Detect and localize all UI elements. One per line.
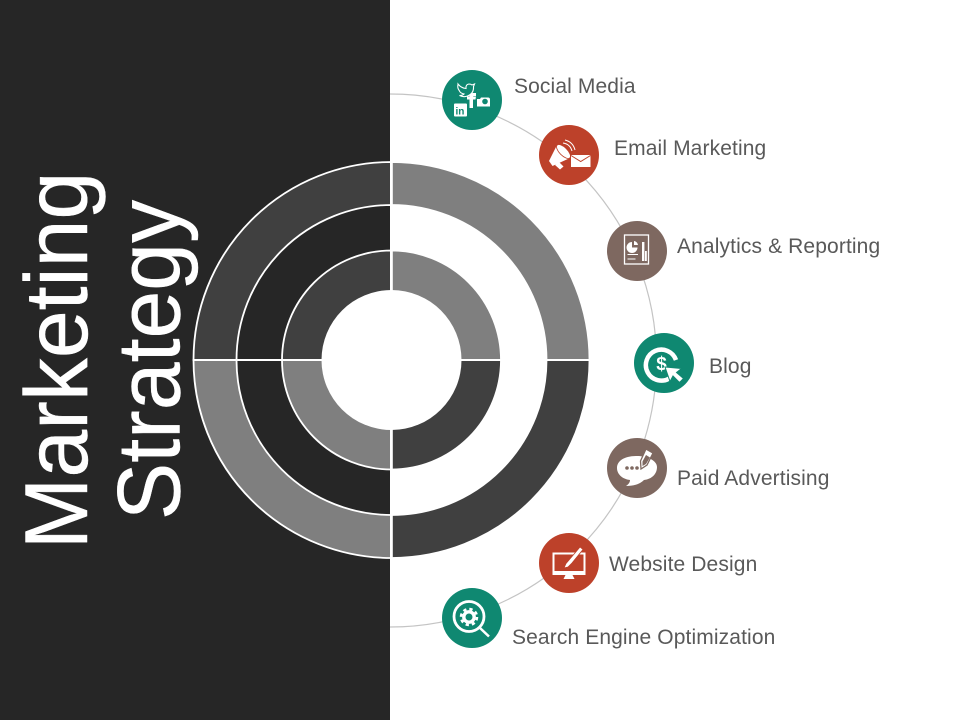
title: Strategy [99,200,199,520]
icon: speech bubble with pen [607,438,667,498]
item: analytics and reporting [607,221,880,281]
title [6,172,199,549]
left dark panel [0,0,390,720]
center circle [322,290,462,430]
item: social media [442,70,636,130]
icon: monitor with brush [539,533,599,593]
middle ring [236,205,546,515]
icon: social media [442,70,502,130]
title: Marketing [6,172,106,549]
label: paid advertising: Paid Advertising [677,467,830,490]
icon: gear magnifier [442,588,502,648]
label: blog: Blog [709,355,752,378]
label: search engine optimization: Search Engine Optimization [512,626,775,649]
item: search engine optimization [442,588,775,649]
outer ring [194,162,590,558]
concentric ring chart [194,162,590,558]
vertical seam [390,162,393,558]
item: blog [634,333,752,393]
label: email marketing: Email Marketing [614,137,766,160]
label: analytics and reporting: Analytics & Reporting [677,235,880,258]
item: website design [539,533,757,593]
connecting arc [390,94,656,627]
icon: megaphone and envelope [539,125,599,185]
horizontal seam [193,359,590,361]
icon: social media: in [456,106,464,118]
label: social media: Social Media [514,75,636,98]
item: paid advertising [607,438,830,498]
icon: report [607,221,667,281]
item: email marketing [539,125,766,185]
label: website design: Website Design [609,553,757,576]
icon: dollar target with cursor: $ [656,354,667,375]
inner ring [282,250,501,470]
